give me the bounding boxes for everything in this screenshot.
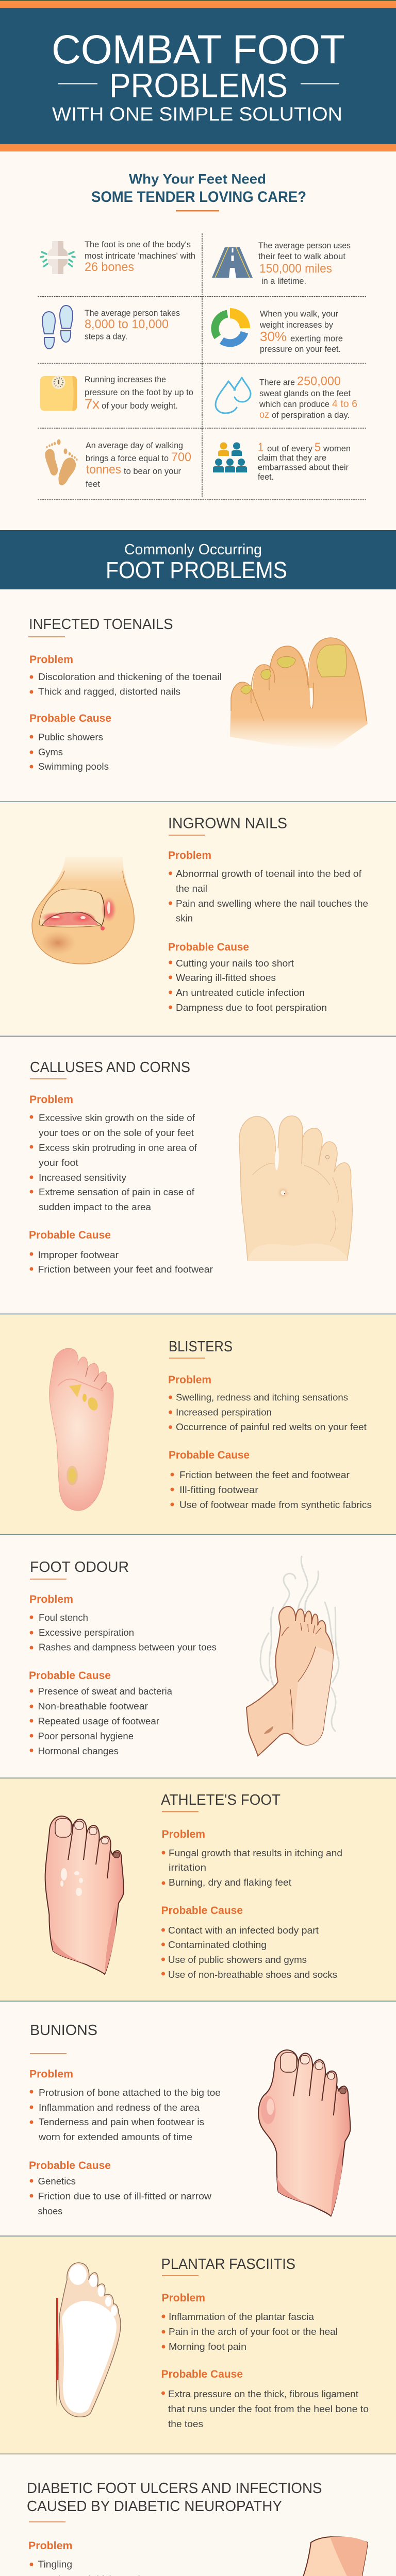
panel: calluses and corns: CALLUSES AND CORNS [30, 1059, 190, 1076]
illustration: ingrown toenail [32, 857, 134, 964]
cause list: Extra pressure on the thick, fibrous ligament [168, 2389, 358, 2399]
problem list [162, 1848, 342, 1888]
problem list: your foot [39, 1158, 78, 1168]
title line 2: PROBLEMS [109, 66, 288, 104]
panel: diabetic foot ulcers: DIABETIC FOOT ULCERS AND INFECTIONS [27, 2480, 322, 2497]
problem list: Extreme sensation of pain in case of [39, 1187, 195, 1197]
cause list [30, 2176, 212, 2216]
fact: 7x body weight: pressure on the foot by up to [85, 387, 193, 397]
problem list: Thick and ragged, distorted nails [38, 686, 180, 697]
fact: 150,000 miles: in a lifetime. [261, 276, 306, 286]
problem list: Tenderness and pain when footwear is [39, 2117, 204, 2127]
cause list: Genetics [38, 2176, 76, 2187]
problem list [30, 672, 222, 697]
icon: bare footprints [45, 439, 78, 485]
fact: 8,000 to 10,000 steps: The average person takes [85, 308, 180, 318]
cause list: Public showers [38, 732, 103, 742]
fact: 30% weight: 30% [260, 329, 287, 344]
problem list: Excessive skin growth on the side of [39, 1113, 195, 1123]
fact: 7x body weight: of your body weight. [102, 401, 178, 411]
cause list: Dampness due to foot perspiration [176, 1003, 327, 1013]
fact: 700 tonnes: 700 [171, 450, 191, 464]
fact: 700 tonnes: feet [86, 479, 100, 489]
problem list: Protrusion of bone attached to the big toe [39, 2088, 221, 2098]
problem list: Pain and swelling where the nail touches the [176, 899, 368, 909]
fact: 250,000 sweat glands: sweat glands on the feet [259, 388, 351, 398]
cause list: Use of footwear made from synthetic fabrics [179, 1500, 372, 1510]
panel: athlete's foot: ATHLETE'S FOOT [161, 1792, 280, 1808]
panel: ingrown nails: INGROWN NAILS [168, 815, 287, 832]
fact: 250,000 sweat glands: of perspiration a day. [272, 410, 350, 420]
problem list: Fungal growth that results in itching and [169, 1848, 342, 1858]
panel: foot odour: Problem [29, 1594, 73, 1605]
panel: calluses and corns: Probable Cause [29, 1229, 111, 1241]
header banner [0, 0, 396, 151]
panel: athlete's foot [0, 1777, 396, 2002]
fact: 150,000 miles: their feet to walk about [258, 251, 345, 261]
fact: 1 out of every 5 women: embarrassed about their [258, 463, 349, 472]
fact: 1 out of every 5 women [213, 440, 351, 482]
cause list: Friction due to use of ill-fitted or narrow [38, 2191, 212, 2201]
cause list: that runs under the foot from the heel bone to [168, 2404, 369, 2414]
cause list: Wearing ill-fitted shoes [176, 973, 276, 983]
panel: ingrown nails: Problem [168, 850, 211, 861]
fact: 250,000 sweat glands: 4 to 6 [332, 399, 357, 410]
banner: commonly occurring foot problems: Commonly Occurring [124, 541, 262, 558]
cause list: Use of non-breathable shoes and socks [168, 1970, 337, 1980]
fact: 7x body weight: Running increases the [85, 375, 166, 384]
problem list: Discoloration and thickening of the toenail [38, 672, 222, 682]
panel: infected toenails [28, 616, 368, 772]
fact: 1 out of every 5 women: women [323, 444, 351, 453]
problem list: sudden impact to the area [39, 1202, 152, 1212]
panel: plantar fasciitis: PLANTAR FASCIITIS [161, 2256, 295, 2273]
problem list [162, 2312, 338, 2352]
cause list [169, 958, 327, 1013]
cause list: Poor personal hygiene [38, 1731, 134, 1741]
fact: 700 tonnes: tonnes [86, 463, 121, 477]
cause list [170, 1470, 372, 1510]
cause list: Contact with an infected body part [168, 1925, 319, 1936]
problem list: the nail [176, 884, 207, 894]
cause list [30, 1686, 173, 1756]
cause list [30, 732, 109, 772]
fact: 250,000 sweat glands: There are [259, 377, 295, 387]
panel: calluses and corns: Problem [29, 1094, 73, 1106]
cause list [161, 2389, 369, 2429]
problem list [30, 1113, 197, 1212]
problem list: Excess skin protruding in one area of [39, 1143, 197, 1153]
fact: 26 bones: most intricate 'machines' with [85, 251, 195, 261]
panel: blisters: Probable Cause [169, 1449, 250, 1461]
cause list: Cutting your nails too short [176, 958, 294, 969]
panel: athlete's foot: Problem [162, 1828, 205, 1840]
panel: plantar fasciitis: Problem [162, 2292, 205, 2304]
cause list [161, 1925, 337, 1980]
illustration: diabetic foot with ulcer [191, 2536, 368, 2576]
panel: calluses and corns [0, 1036, 396, 1275]
fact: 250,000 sweat glands: which can produce [259, 399, 329, 409]
problem list: Rashes and dampness between your toes [39, 1642, 217, 1653]
cause list: Presence of sweat and bacteria [38, 1686, 173, 1697]
cause list: Use of public showers and gyms [168, 1955, 307, 1965]
section heading: why your feet need care: SOME TENDER LOVING CARE? [91, 189, 306, 206]
cause list: the toes [168, 2419, 203, 2429]
fact: 250,000 sweat glands [216, 374, 357, 420]
problem list: Tingling [38, 2560, 72, 2570]
fact: 1 out of every 5 women: claim that they are [258, 453, 326, 463]
fact: 1 out of every 5 women: out of every [267, 444, 312, 453]
fact: 7x body weight: 7x [85, 396, 100, 412]
section heading: why your feet need care [91, 171, 306, 211]
fact: 30% weight: pressure on your feet. [260, 344, 341, 354]
cause list: Swimming pools [38, 761, 109, 772]
fact: 1 out of every 5 women: 5 [315, 440, 321, 454]
cause list: Non-breathable footwear [38, 1701, 148, 1711]
fact: 26 bones [41, 240, 195, 274]
fact: 26 bones: 26 bones [85, 260, 134, 274]
fact: 250,000 sweat glands: oz [259, 410, 269, 420]
problem list [169, 869, 368, 923]
title line 1: COMBAT FOOT [52, 26, 345, 72]
cause list [30, 1250, 213, 1275]
panel: plantar fasciitis: Probable Cause [161, 2368, 243, 2380]
panel: diabetic foot ulcers [0, 2454, 396, 2576]
fact: 30% weight: weight increases by [259, 320, 333, 330]
problem list: worn for extended amounts of time [38, 2132, 192, 2142]
title line 3: WITH ONE SIMPLE SOLUTION [52, 104, 342, 125]
fact: 1 out of every 5 women: 1 [258, 440, 263, 454]
panel: infected toenails: Problem [29, 654, 73, 666]
fact: 700 tonnes: to bear on your [124, 466, 181, 476]
cause list: Repeated usage of footwear [38, 1716, 159, 1726]
panel: ingrown nails [0, 802, 396, 1036]
fact: 30% weight [215, 309, 343, 354]
fact: 700 tonnes [45, 439, 191, 489]
cause list: Improper footwear [38, 1250, 119, 1260]
illustration: athlete's foot [45, 1816, 124, 1974]
problem list: your toes or on the sole of your feet [39, 1128, 194, 1138]
panel: foot odour: Probable Cause [29, 1670, 111, 1682]
panel: infected toenails: INFECTED TOENAILS [29, 616, 173, 633]
cause list: Friction between your feet and footwear [38, 1264, 213, 1275]
panel: foot odour: FOOT ODOUR [30, 1559, 129, 1575]
banner: commonly occurring foot problems [0, 530, 396, 589]
problem list [30, 2560, 185, 2576]
panel: diabetic foot ulcers: Problem [28, 2540, 72, 2552]
icon: shoe prints [42, 306, 73, 349]
problem list: skin [176, 913, 193, 923]
cause list: Gyms [38, 747, 63, 757]
panel: bunions: BUNIONS [30, 2022, 97, 2039]
cause list: Friction between the feet and footwear [179, 1470, 350, 1480]
cause list: Ill-fitting footwear [179, 1485, 258, 1495]
fact: 700 tonnes: brings a force equal to [86, 453, 169, 463]
fact: 8,000 to 10,000 steps: steps a day. [85, 332, 127, 341]
panel: blisters: BLISTERS [169, 1338, 233, 1355]
panel: plantar fasciitis [0, 2236, 396, 2454]
problem list: Burning, dry and flaking feet [169, 1877, 291, 1888]
problem list [30, 2088, 221, 2142]
icon: road [212, 247, 253, 278]
fact: 8,000 to 10,000 steps [42, 306, 180, 349]
problem list: Increased perspiration [176, 1408, 272, 1418]
illustration: smelly foot [246, 1556, 339, 1756]
problem list: Foul stench [39, 1613, 88, 1623]
fact: 250,000 sweat glands: 250,000 [297, 374, 341, 388]
fact: 1 out of every 5 women: feet. [258, 472, 274, 482]
fact: 8,000 to 10,000 steps: 8,000 to 10,000 [85, 317, 169, 331]
panel: infected toenails: Probable Cause [29, 713, 111, 724]
problem list: Inflammation and redness of the area [39, 2103, 200, 2113]
illustration: foot with blisters [50, 1348, 113, 1511]
section heading: why your feet need care: Why Your Feet Need [129, 171, 266, 187]
banner: commonly occurring foot problems: FOOT PROBLEMS [106, 557, 287, 583]
icon: group of people [213, 442, 247, 472]
panel: blisters: Problem [168, 1374, 211, 1386]
illustration: plantar sole [56, 2263, 121, 2417]
fact: 30% weight: When you walk, your [260, 309, 338, 318]
problem list [30, 1613, 217, 1653]
problem list: Abnormal growth of toenail into the bed of [176, 869, 362, 879]
problem list: Morning foot pain [169, 2342, 246, 2352]
problem list: Occurrence of painful red welts on your feet [176, 1422, 367, 1432]
panel: athlete's foot: Probable Cause [161, 1905, 243, 1917]
problem list: Excessive perspiration [39, 1628, 134, 1638]
cause list: Hormonal changes [38, 1746, 119, 1756]
panel: blisters [0, 1314, 396, 1534]
illustration: foot with bunion [258, 2050, 350, 2216]
fact: 150,000 miles: The average person uses [258, 241, 351, 250]
fact: 30% weight: exerting more [290, 334, 343, 343]
icon: sweat drops [216, 378, 251, 413]
panel: bunions: Probable Cause [29, 2160, 111, 2172]
cause list: shoes [38, 2206, 62, 2216]
panel: diabetic foot ulcers: CAUSED BY DIABETIC NEUROPATHY [27, 2498, 282, 2515]
illustration: sole with corn [239, 1116, 352, 1261]
problem list: irritation [169, 1862, 206, 1873]
panel: bunions [29, 2022, 350, 2216]
icon: weighing scale [40, 376, 77, 411]
icon: donut chart [215, 313, 245, 343]
problem list: Swelling, redness and itching sensations [176, 1392, 348, 1402]
cause list: An untreated cuticle infection [176, 988, 305, 998]
fact: 150,000 miles [212, 241, 351, 286]
cause list: Contaminated clothing [168, 1940, 267, 1950]
panel: ingrown nails: Probable Cause [168, 941, 249, 953]
problem list [169, 1392, 367, 1432]
problem list: Increased sensitivity [39, 1173, 126, 1183]
problem list: Pain in the arch of your foot or the heal [169, 2327, 338, 2337]
fact: 7x body weight [40, 375, 193, 412]
panel: bunions: Problem [29, 2068, 73, 2080]
fact: 150,000 miles: 150,000 miles [259, 262, 332, 276]
illustration: infected toes [230, 638, 368, 750]
panel: foot odour [0, 1534, 396, 1756]
problem list: Inflammation of the plantar fascia [169, 2312, 315, 2322]
fact: 26 bones: The foot is one of the body's [85, 240, 191, 249]
icon: bone joint [41, 241, 75, 274]
fact: 700 tonnes: An average day of walking [86, 440, 183, 450]
